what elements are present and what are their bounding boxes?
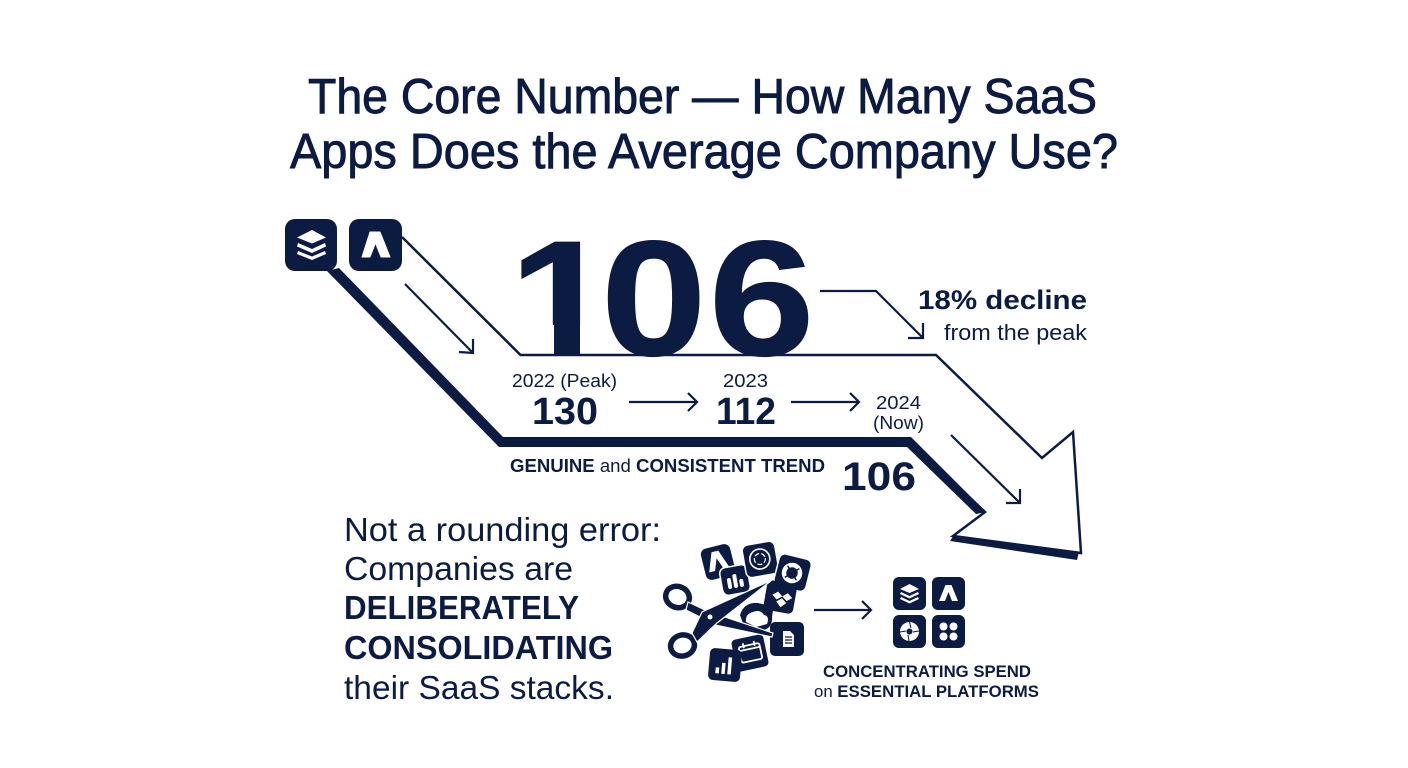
icon: scattered app tiles being cut xyxy=(663,540,813,682)
arrow: to essentials xyxy=(814,601,871,619)
tile: document xyxy=(770,622,804,656)
arrow 2023 to 2024 xyxy=(791,393,859,411)
callout: 18% decline xyxy=(918,285,1088,345)
year 2024 now: 2024 xyxy=(876,393,921,413)
tile: layers xyxy=(893,577,926,610)
trend label: GENUINE and CONSISTENT TREND xyxy=(510,456,825,476)
callout arrow from big number xyxy=(820,291,923,338)
year 2024 now: (Now) xyxy=(873,413,924,433)
takeaway text xyxy=(344,511,661,706)
value 106 for 2024: 106 xyxy=(842,455,916,499)
stray dot xyxy=(654,537,658,541)
title: The Core Number — How Many SaaS xyxy=(308,70,1097,124)
takeaway text: Not a rounding error: xyxy=(344,511,661,548)
scissors xyxy=(663,580,773,659)
tile: bars xyxy=(719,564,751,596)
tile: chart xyxy=(708,648,742,682)
big number 106: 106 xyxy=(509,206,815,390)
takeaway text: DELIBERATELY xyxy=(344,589,579,626)
year 2023 xyxy=(716,371,776,433)
arrow: down along the trend xyxy=(405,284,473,353)
year 2022 peak xyxy=(512,371,617,433)
caption: concentrating spend: on ESSENTIAL PLATFORMS xyxy=(814,683,1039,701)
caption: concentrating spend xyxy=(814,663,1039,701)
icon: caret tile xyxy=(349,219,402,271)
callout: 18% decline: 18% decline xyxy=(918,285,1087,315)
year 2022 peak: 2022 (Peak) xyxy=(512,371,617,391)
title: Apps Does the Average Company Use? xyxy=(290,125,1118,179)
tile: aperture xyxy=(893,615,926,648)
tile: dropbox xyxy=(763,580,798,614)
tile: caret xyxy=(932,577,965,610)
icon: layers tile xyxy=(285,219,337,271)
year 2023: 112 xyxy=(716,391,776,433)
callout: 18% decline: from the peak xyxy=(944,320,1088,345)
tile: lifebuoy xyxy=(773,553,813,593)
downward trend arrow outline xyxy=(327,237,1081,560)
takeaway text: CONSOLIDATING xyxy=(344,629,613,666)
arrow 2022 to 2023 xyxy=(629,393,697,411)
year 2022 peak: 130 xyxy=(532,391,598,433)
tile: ring xyxy=(741,540,780,579)
arrow: down to arrowhead xyxy=(951,435,1020,503)
takeaway text: their SaaS stacks. xyxy=(344,669,614,706)
icon: essential platforms grid xyxy=(893,577,965,648)
tile: calendar xyxy=(730,633,770,673)
caption: concentrating spend: CONCENTRATING SPEND xyxy=(823,663,1031,681)
tile: cloud xyxy=(740,603,774,630)
tile: four dots xyxy=(932,615,965,648)
tile: caret xyxy=(700,543,736,581)
year 2024 now xyxy=(873,393,924,433)
title xyxy=(290,70,1118,179)
takeaway text: Companies are xyxy=(344,550,573,587)
year 2023: 2023 xyxy=(723,371,768,391)
